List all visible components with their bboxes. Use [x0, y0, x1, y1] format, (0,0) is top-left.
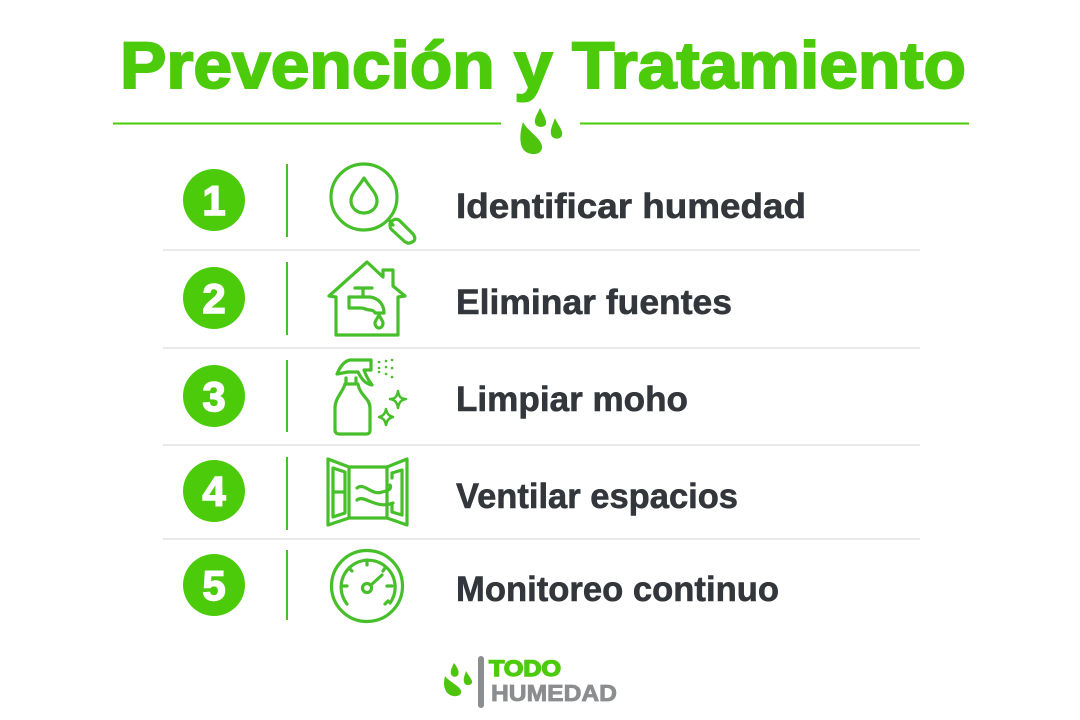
- number badge 1: [183, 169, 245, 231]
- number badge 5: 5: [202, 562, 226, 609]
- label 1: Identificar humedad: [456, 187, 806, 226]
- number badge 4: 4: [202, 468, 226, 515]
- icon: magnifier with drop: [331, 164, 415, 243]
- logo text todo: TODO: [489, 656, 561, 681]
- header divider with drops: [113, 108, 969, 154]
- icon: gauge: [332, 550, 402, 622]
- row 1: [183, 164, 806, 243]
- row 4: [183, 457, 738, 530]
- logo: [444, 656, 617, 708]
- label 2: Eliminar fuentes: [456, 283, 732, 322]
- number badge 4: [183, 460, 245, 522]
- row 2: [183, 262, 732, 335]
- number badge 3: [183, 365, 245, 427]
- icon: logo drops: [444, 663, 472, 696]
- icon: spray bottle: [335, 360, 406, 434]
- number badge 2: [183, 267, 245, 329]
- title: Prevención y Tratamiento: [120, 28, 966, 102]
- row 5: [183, 550, 779, 622]
- label 3: Limpiar moho: [456, 380, 688, 419]
- logo text humedad: HUMEDAD: [491, 680, 617, 706]
- number badge 1: 1: [202, 177, 226, 224]
- number badge 2: 2: [202, 275, 226, 322]
- icon: open window with air: [328, 459, 407, 525]
- label 4: Ventilar espacios: [456, 477, 738, 516]
- icon: house with tap: [329, 262, 405, 335]
- row 3: [183, 360, 688, 434]
- label 5: Monitoreo continuo: [456, 570, 779, 609]
- icon: water drops: [520, 108, 562, 154]
- number badge 3: 3: [202, 373, 226, 420]
- number badge 5: [183, 554, 245, 616]
